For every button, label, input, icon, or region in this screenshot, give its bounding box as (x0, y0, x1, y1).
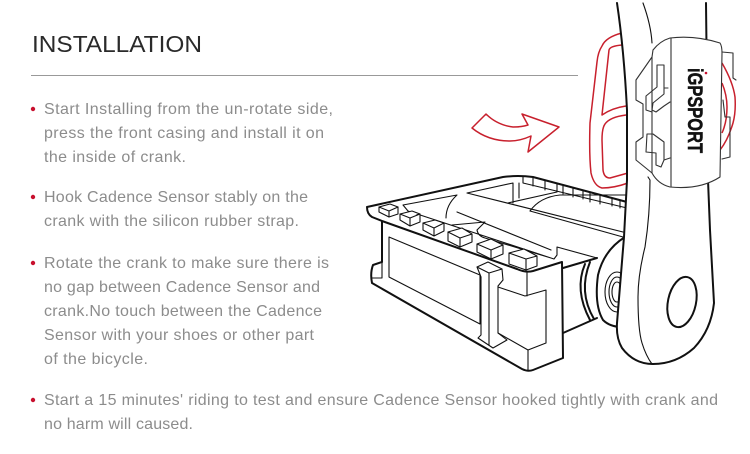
text block: step 4 (31, 392, 718, 433)
text block: step 1: press the front casing and install it on (44, 125, 324, 142)
text block: step 3: crank.No touch between the Cadence (44, 303, 322, 320)
illustration: cadence sensor (636, 37, 736, 188)
pedal front panels (389, 237, 480, 324)
text block: step 1 (31, 101, 333, 166)
pedal body outline (367, 176, 627, 371)
pedal studs (379, 204, 398, 217)
logo: IGPSPORT: iGPSPORT (683, 68, 706, 153)
text block: step 2: crank with the silicon rubber strap. (44, 213, 299, 230)
text block: step 2: Hook Cadence Sensor stably on the (44, 189, 308, 206)
text block: step 3: Rotate the crank to make sure there is (44, 255, 329, 272)
pedal axle (563, 258, 597, 333)
text block: step 3: Sensor with your shoes or other part (44, 327, 315, 344)
text block: step 3 (31, 255, 329, 368)
illustration: crank arm (617, 3, 714, 364)
illustration: strap in red (590, 33, 735, 188)
text block: step 4: Start a 15 minutes' riding to test and ensure Cadence Sensor hooked tightly with crank and (44, 392, 718, 409)
icon: rotation arrow (472, 114, 559, 152)
text block: step 1: the inside of crank. (44, 149, 186, 166)
illustration: pedal (367, 176, 629, 371)
pedal top frame (403, 195, 597, 268)
text block: step 1: Start Installing from the un-rotate side, (44, 101, 333, 118)
text block: step 3: of the bicycle. (44, 351, 148, 368)
title: INSTALLATION (32, 31, 202, 57)
strap tabs (722, 52, 736, 159)
text block: step 2 (31, 189, 308, 230)
text block: step 4: no harm will caused. (44, 416, 193, 433)
text block: step 3: no gap between Cadence Sensor and (44, 279, 320, 296)
